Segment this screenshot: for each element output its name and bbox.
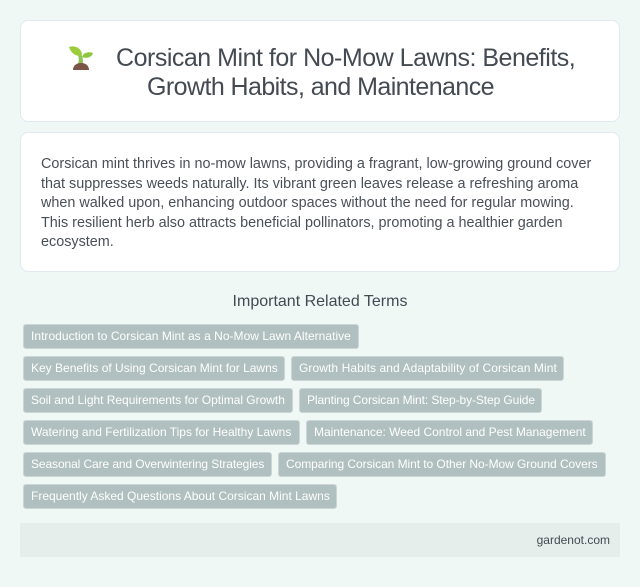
tag <box>23 452 272 477</box>
title line 1: Corsican Mint for No-Mow Lawns: Benefits, <box>116 44 575 72</box>
tag <box>278 452 606 477</box>
tag <box>23 324 359 349</box>
title line 2: Growth Habits, and Maintenance <box>147 73 494 101</box>
tag: Watering and Fertilization Tips for Healthy Lawns <box>31 425 291 439</box>
panel: title card <box>20 20 620 122</box>
body text line 2: that suppresses weeds naturally. Its vibrant green leaves release a refreshing aroma <box>41 176 578 192</box>
footer bar <box>20 523 620 557</box>
tag <box>291 356 564 381</box>
body text line 5: ecosystem. <box>41 234 114 250</box>
icon: seedling <box>69 46 93 70</box>
tag <box>23 388 293 413</box>
body text line 3: when walked upon, enhancing outdoor spaces without the need for regular mowing. <box>41 195 574 211</box>
tag <box>306 420 593 445</box>
body text line 1: Corsican mint thrives in no-mow lawns, providing a fragrant, low-growing ground cover <box>41 156 591 172</box>
tag <box>23 356 285 381</box>
tag <box>23 484 337 509</box>
tag: Growth Habits and Adaptability of Corsican Mint <box>299 361 557 375</box>
tag: Planting Corsican Mint: Step-by-Step Guide <box>307 393 535 407</box>
tag <box>23 420 300 445</box>
tag: Frequently Asked Questions About Corsican Mint Lawns <box>31 489 330 503</box>
tag: Comparing Corsican Mint to Other No-Mow Ground Covers <box>286 457 598 471</box>
tag: Key Benefits of Using Corsican Mint for Lawns <box>31 361 278 375</box>
tag: Seasonal Care and Overwintering Strategies <box>31 457 264 471</box>
tag: Soil and Light Requirements for Optimal Growth <box>31 393 285 407</box>
panel: description card <box>20 132 620 272</box>
heading: related terms: Important Related Terms <box>233 293 407 310</box>
footer site name: gardenot.com <box>537 533 610 547</box>
tag: Introduction to Corsican Mint as a No-Mow Lawn Alternative <box>31 329 351 343</box>
tag <box>299 388 542 413</box>
body text line 4: This resilient herb also attracts beneficial pollinators, promoting a healthier garden <box>41 215 563 231</box>
tag: Maintenance: Weed Control and Pest Management <box>314 425 586 439</box>
